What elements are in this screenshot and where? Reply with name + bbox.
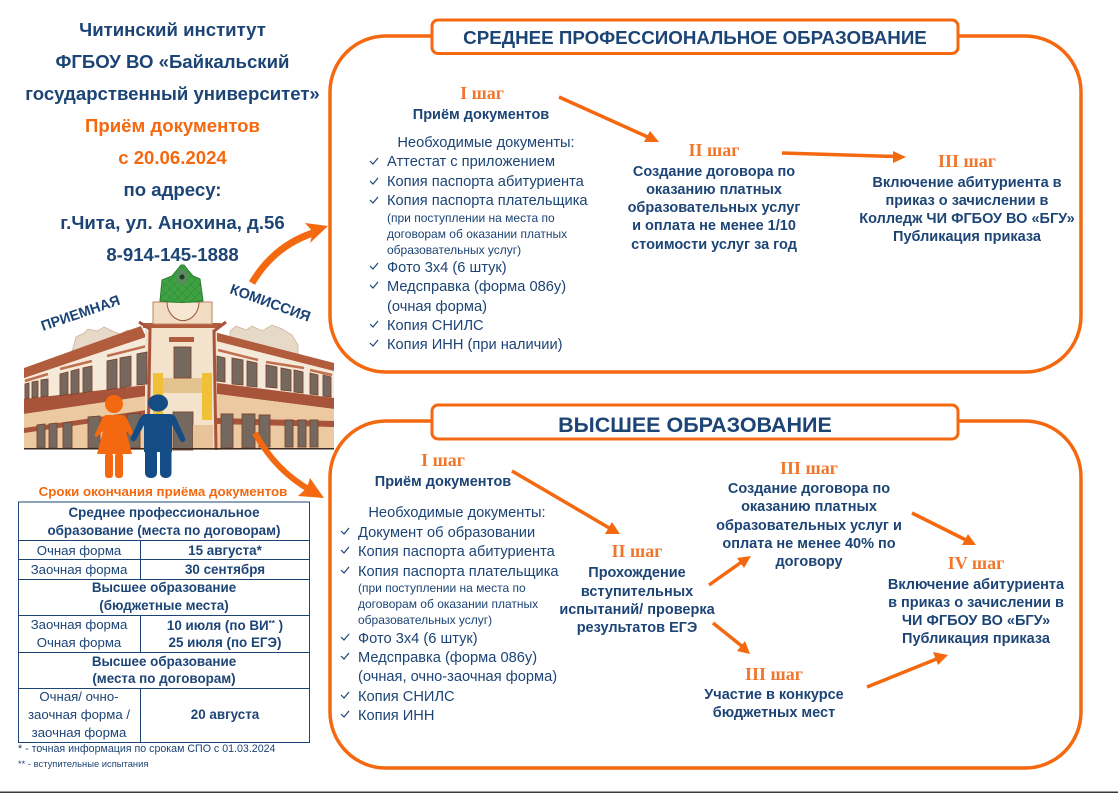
institute heading and address: Читинский институт (79, 19, 266, 40)
step 1 and document list: договорам об оказании платных (358, 597, 538, 611)
building illustration (24, 265, 334, 450)
step 3 contract: оказанию платных (741, 499, 877, 515)
header: higher education: ВЫСШЕЕ ОБРАЗОВАНИЕ (558, 413, 832, 437)
step 2 (559, 541, 716, 636)
step 1 and document list: Копия ИНН (при наличии) (387, 337, 563, 353)
step 2: стоимости услуг за год (631, 237, 797, 253)
deadlines table: 10 июля (по ВИ (167, 618, 269, 633)
step 2: II шаг (689, 140, 739, 160)
institute heading and address: 8-914-145-1888 (106, 244, 239, 265)
arrow: step 1 to 2 (559, 97, 659, 142)
footnotes (18, 743, 276, 769)
icon: man (131, 394, 185, 478)
step 3 budget contest (704, 664, 844, 721)
deadlines table: 15 августа* (188, 543, 263, 558)
panel: secondary vocational education (330, 20, 1081, 372)
step 1 and document list: (очная, очно-заочная форма) (358, 669, 557, 685)
deadlines table: 20 августа (191, 707, 260, 722)
step 1 and document list: Документ об образовании (358, 525, 535, 541)
step 1 and document list: Копия паспорта плательщика (387, 193, 588, 209)
step 1 and document list: Аттестат с приложением (387, 154, 555, 170)
step 3 budget contest: Участие в конкурсе (704, 687, 844, 703)
step 3: приказ о зачислении в (886, 193, 1049, 209)
step 1 and document list: образовательных услуг) (387, 243, 521, 257)
step 2: и оплата не менее 1/10 (632, 218, 796, 234)
step 3 (859, 151, 1075, 245)
step 1 and document list: образовательных услуг) (358, 613, 492, 627)
deadlines table: (места по договорам) (92, 671, 236, 686)
arrow: step 2 to 3 lower (713, 623, 750, 654)
step 1 and document list: Копия ИНН (358, 708, 434, 724)
deadlines table: 30 сентября (185, 562, 265, 577)
label: ПРИЕМНАЯ: ПРИЕМНАЯ (39, 293, 122, 335)
deadlines table: заочная форма (32, 725, 127, 740)
arrow: to secondary education (252, 223, 328, 283)
step 3 contract (716, 458, 902, 570)
step 2: II шаг (612, 541, 662, 561)
institute heading and address: по адресу: (124, 179, 221, 200)
deadlines table: заочная форма / (28, 707, 130, 722)
step 2: вступительных (581, 584, 693, 600)
step 3 budget contest: бюджетных мест (713, 705, 835, 721)
footnotes: ** - вступительные испытания (18, 758, 148, 769)
step 1 and document list: Медсправка (форма 086у) (358, 650, 537, 666)
header: secondary vocational education (432, 20, 958, 54)
arrow: to step 4 upper (912, 513, 976, 545)
step 4: Включение абитуриента (888, 577, 1065, 593)
step 3 contract: образовательных услуг и (716, 518, 902, 534)
step 2: результатов ЕГЭ (577, 620, 697, 636)
deadlines table: (бюджетные места) (99, 598, 229, 613)
step 2: Создание договора по (633, 164, 795, 180)
step 3: Публикация приказа (893, 229, 1042, 245)
deadlines table: образование (места по договорам) (47, 523, 281, 538)
header: higher education (432, 405, 958, 439)
step 1 and document list: I шаг (421, 450, 465, 470)
institute heading and address: Приём документов (85, 115, 260, 136)
deadlines table: ** (269, 619, 276, 628)
step 2: испытаний/ проверка (559, 602, 716, 618)
step 3: Колледж ЧИ ФГБОУ ВО «БГУ» (859, 211, 1075, 227)
step 1 and document list (370, 83, 588, 353)
step 3 contract: III шаг (780, 458, 838, 478)
deadlines table (18, 502, 310, 742)
panel: higher education (330, 405, 1081, 768)
deadlines table: Высшее образование (92, 654, 236, 669)
institute heading and address: государственный университет» (25, 83, 320, 104)
deadlines title: Сроки окончания приёма документов (39, 484, 287, 499)
institute heading and address: г.Чита, ул. Анохина, д.56 (60, 212, 285, 233)
step 4: ЧИ ФГБОУ ВО «БГУ» (902, 613, 1050, 629)
step 4 (888, 553, 1065, 647)
icon: woman (95, 395, 134, 478)
step 1 and document list: I шаг (460, 83, 504, 103)
footnotes: * - точная информация по срокам СПО с 01.03.2024 (18, 743, 276, 755)
label: КОМИССИЯ: КОМИССИЯ (228, 282, 312, 326)
step 3 contract: договору (775, 554, 843, 570)
step 3 budget contest: III шаг (745, 664, 803, 684)
header: secondary vocational education: СРЕДНЕЕ ПРОФЕССИОНАЛЬНОЕ ОБРАЗОВАНИЕ (463, 27, 927, 48)
step 1 and document list: Копия паспорта абитуриента (358, 544, 556, 560)
step 1 and document list: Необходимые документы: (368, 505, 546, 521)
arrow: step 1 to 2 (512, 471, 620, 534)
deadlines table: Очная/ очно- (39, 689, 119, 704)
deadlines table: Среднее профессиональное (68, 505, 260, 520)
step 1 and document list: (очная форма) (387, 299, 487, 315)
step 4: в приказ о зачислении в (888, 595, 1064, 611)
step 3: III шаг (938, 151, 996, 171)
institute heading and address (25, 19, 320, 265)
step 1 and document list: договорам об оказании платных (387, 227, 567, 241)
step 1 and document list: Приём документов (375, 474, 511, 490)
step 4: Публикация приказа (902, 631, 1051, 647)
step 2: Прохождение (588, 565, 686, 581)
step 1 and document list: Копия СНИЛС (358, 689, 455, 705)
deadlines table: ) (275, 618, 283, 633)
step 1 and document list: Копия паспорта плательщика (358, 564, 559, 580)
deadlines table: Очная форма (37, 543, 122, 558)
arrow: step 2 to 3 (782, 151, 906, 163)
step 3 contract: оплата не менее 40% по (722, 536, 896, 552)
deadlines table: 25 июля (по ЕГЭ) (169, 635, 281, 650)
step 3 contract: Создание договора по (728, 481, 890, 497)
step 1 and document list (341, 450, 559, 724)
institute heading and address: ФГБОУ ВО «Байкальский (56, 51, 289, 72)
deadlines table: Заочная форма (31, 562, 128, 577)
step 1 and document list: Фото 3х4 (6 штук) (358, 631, 478, 647)
step 1 and document list: Медсправка (форма 086у) (387, 279, 566, 295)
step 4: IV шаг (948, 553, 1004, 573)
arrow: to higher education (255, 433, 324, 498)
step 1 and document list: (при поступлении на места по (358, 581, 526, 595)
arrow: step 2 to 3 upper (709, 556, 751, 585)
deadlines table: Высшее образование (92, 580, 236, 595)
step 2 (628, 140, 800, 253)
step 1 and document list: Необходимые документы: (397, 135, 575, 151)
institute heading and address: с 20.06.2024 (118, 147, 227, 168)
deadlines table: Очная форма (37, 635, 122, 650)
step 1 and document list: (при поступлении на места по (387, 211, 555, 225)
step 2: образовательных услуг (628, 200, 800, 216)
deadlines table: Заочная форма (31, 617, 128, 632)
step 2: оказанию платных (646, 182, 782, 198)
step 1 and document list: Копия СНИЛС (387, 318, 484, 334)
step 1 and document list: Приём документов (413, 107, 549, 123)
step 1 and document list: Копия паспорта абитуриента (387, 174, 585, 190)
arrow: to step 4 lower (867, 652, 948, 687)
step 1 and document list: Фото 3х4 (6 штук) (387, 260, 507, 276)
step 3: Включение абитуриента в (872, 175, 1062, 191)
